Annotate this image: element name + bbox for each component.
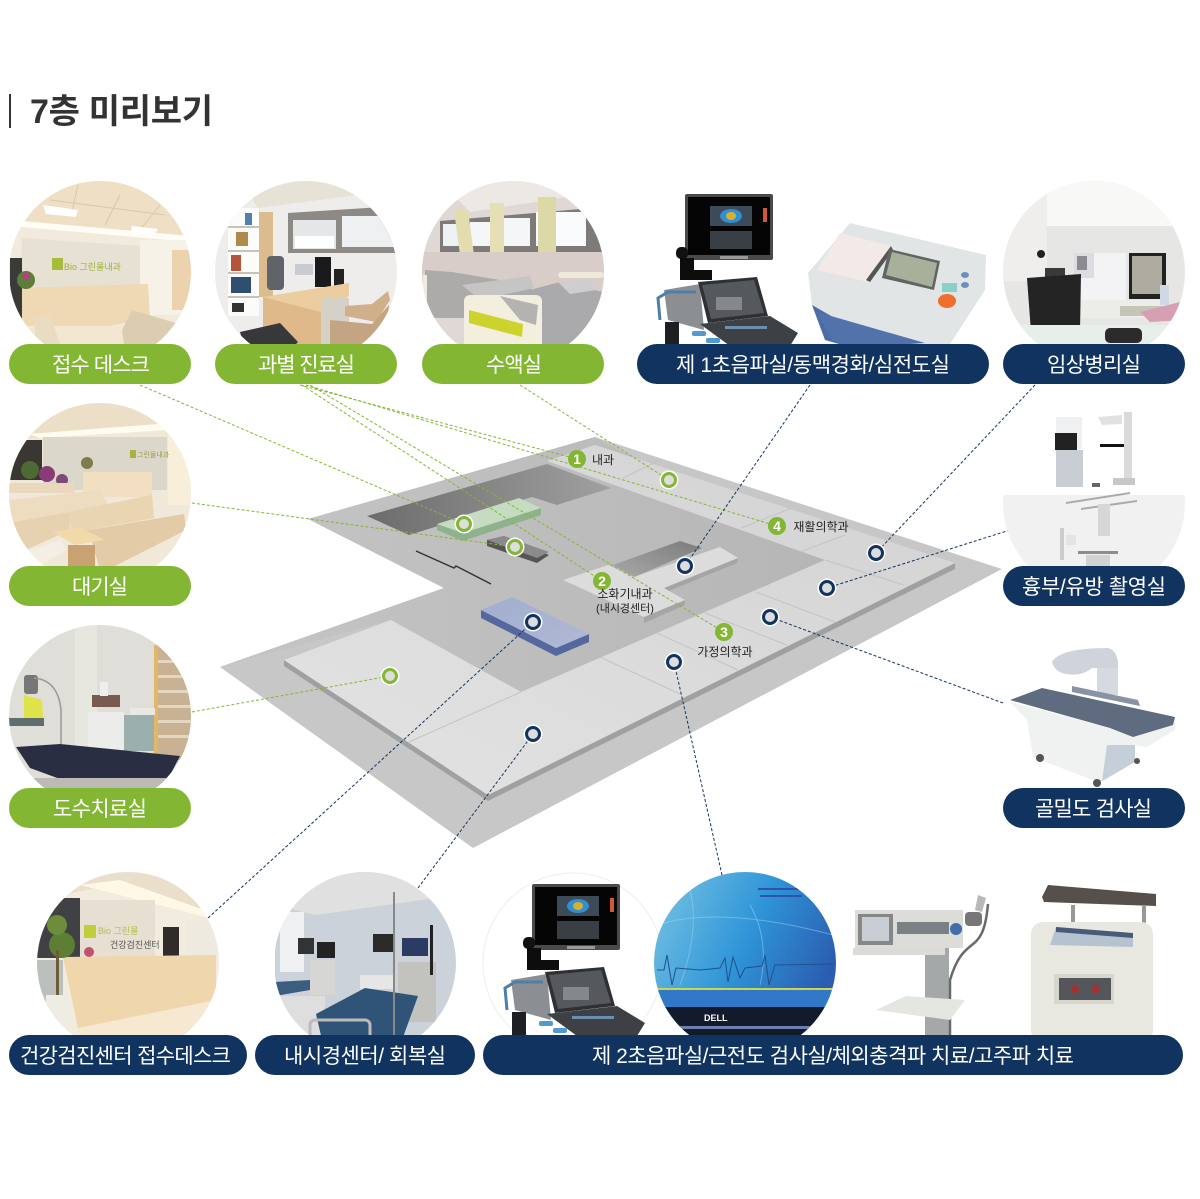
photo: mammography equipment [1055,412,1135,487]
department labels: (내시경센터) [596,602,654,615]
dark zone [367,464,611,535]
photo: waiting room [9,403,191,566]
department labels: 1 [573,451,581,467]
label: waiting room: 대기실 [72,576,128,599]
equipment block [487,536,549,563]
label: second ultrasound and therapy rooms [483,1035,1183,1075]
photo: clinical lab [1003,181,1185,344]
navy connectors [208,385,1035,918]
central room shadow [613,541,702,577]
photo: waiting room: 그린몰내과 [137,450,170,459]
label: endoscopy center recovery room: 내시경센터/ 회복실 [284,1045,446,1068]
label: ultrasound, arteriosclerosis, ECG: 제 1초음파실/동맥경화/심전도실 [676,354,950,377]
green block [437,498,541,541]
label: clinical lab [1003,344,1185,384]
photo: checkup center reception [37,872,219,1035]
raised strip rooms [284,445,955,795]
label: waiting room [9,566,191,606]
department labels: 4 [773,518,781,534]
label: checkup center reception [9,1035,247,1075]
department labels: 내과 [592,453,614,467]
label: endoscopy center recovery room [255,1035,475,1075]
photo: endoscopy recovery room [275,872,456,1035]
photo: EMG screen: DELL [704,1013,728,1023]
connector lines [140,385,1035,918]
label: consultation room: 과별 진료실 [258,354,355,377]
navy markers [526,546,882,740]
photo: checkup center reception: Bio 그린몰 [98,926,138,936]
floor markers [380,470,886,744]
label: manual therapy room: 도수치료실 [53,798,147,821]
green markers [384,474,676,682]
photo: bone density scanner [1010,648,1175,787]
photo: ECG device [808,223,986,350]
label: bone density room: 골밀도 검사실 [1035,798,1152,821]
endoscopy room [563,547,738,623]
photo: infusion room [422,181,604,344]
department labels: 가정의학과 [697,645,753,659]
floor base [220,437,1002,848]
label: infusion room: 수액실 [486,354,542,377]
photo: checkup center reception: 건강검진센터 [110,939,160,950]
green connectors [140,385,777,712]
department labels: 소화기내과 [597,587,653,601]
photo: manual therapy room [9,625,191,788]
label: chest and breast imaging [1003,566,1185,606]
photo: EMG screen [654,872,836,1035]
photo: second ultrasound room [483,873,663,1053]
department labels: 2 [598,573,606,589]
department labels: 재활의학과 [793,520,849,534]
label: manual therapy room [9,788,191,828]
label: reception desk: 접수 데스크 [52,354,150,377]
photo: ultrasound machine [658,194,798,346]
label: checkup center reception: 건강검진센터 접수데스크 [20,1045,231,1068]
label: ultrasound, arteriosclerosis, ECG [637,344,989,384]
label: consultation room [215,344,397,384]
raised strip side [284,563,955,801]
wall line [416,551,491,584]
label: clinical lab: 임상병리실 [1047,354,1141,377]
marker halos [380,470,886,744]
label: infusion room [422,344,604,384]
photo: reception desk [9,181,191,344]
blue block [481,597,589,656]
department labels: 3 [720,624,728,640]
interior floor [220,437,825,692]
photo: consultation room [215,181,397,344]
photo: x-ray room [1003,492,1185,566]
label: bone density room [1003,788,1185,828]
photo: high frequency therapy device [1031,885,1156,1042]
label: second ultrasound and therapy rooms: 제 2초음파실/근전도 검사실/체외충격파 치료/고주파 치료 [592,1045,1074,1068]
label: chest and breast imaging: 흉부/유방 촬영실 [1022,576,1166,599]
label: reception desk [9,344,191,384]
photo: reception desk: Bio 그린몰내과 [64,262,121,272]
department labels [568,450,849,659]
floor plan [220,437,1002,848]
title: 7층 미리보기 [30,93,213,131]
photo: shockwave device [853,895,988,1038]
